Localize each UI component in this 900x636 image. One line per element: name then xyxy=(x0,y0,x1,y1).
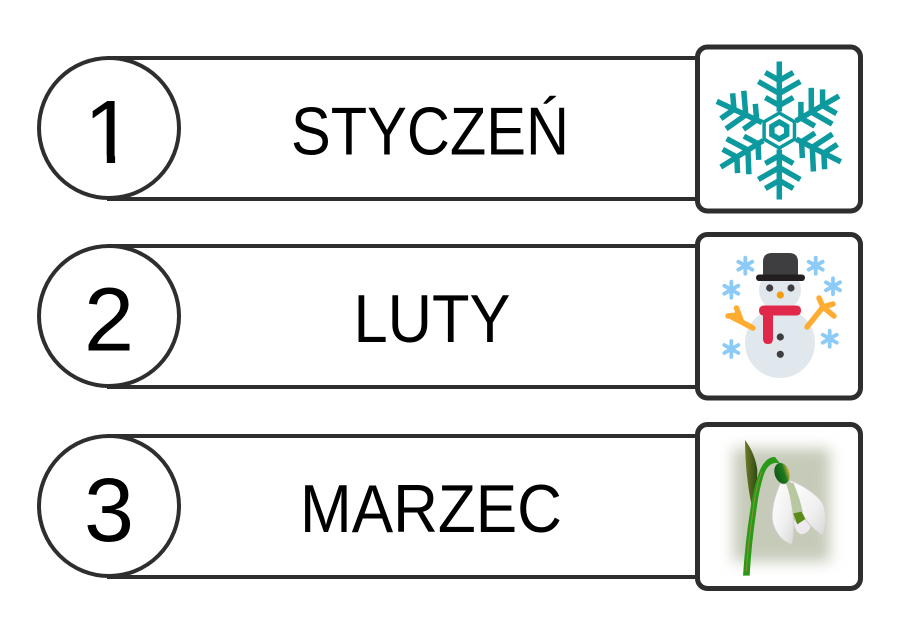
panel: month 2 xyxy=(39,234,860,398)
month name luty: LUTY xyxy=(354,281,510,357)
icon box 1 xyxy=(698,47,860,211)
icon: snowflake xyxy=(708,62,850,200)
icon: snowdrop xyxy=(733,440,830,576)
row bar 1 xyxy=(109,58,697,199)
number circle 1 xyxy=(39,58,179,198)
number 2: 2 xyxy=(84,271,134,371)
month name styczeń: STYCZEŃ xyxy=(291,94,569,170)
number circle 3 xyxy=(39,436,179,576)
icon: snowman xyxy=(724,253,840,378)
panel: month 1 xyxy=(39,47,860,211)
row bar 2 xyxy=(109,246,697,387)
month name marzec: MARZEC xyxy=(300,471,562,547)
icon box 2 xyxy=(698,234,860,398)
number 3: 3 xyxy=(84,461,134,561)
row bar 3 xyxy=(109,436,697,577)
number 1: 1 xyxy=(84,83,134,183)
number circle 2 xyxy=(39,246,179,386)
panel: month 3 xyxy=(39,424,860,588)
icon box 3 xyxy=(698,424,860,588)
